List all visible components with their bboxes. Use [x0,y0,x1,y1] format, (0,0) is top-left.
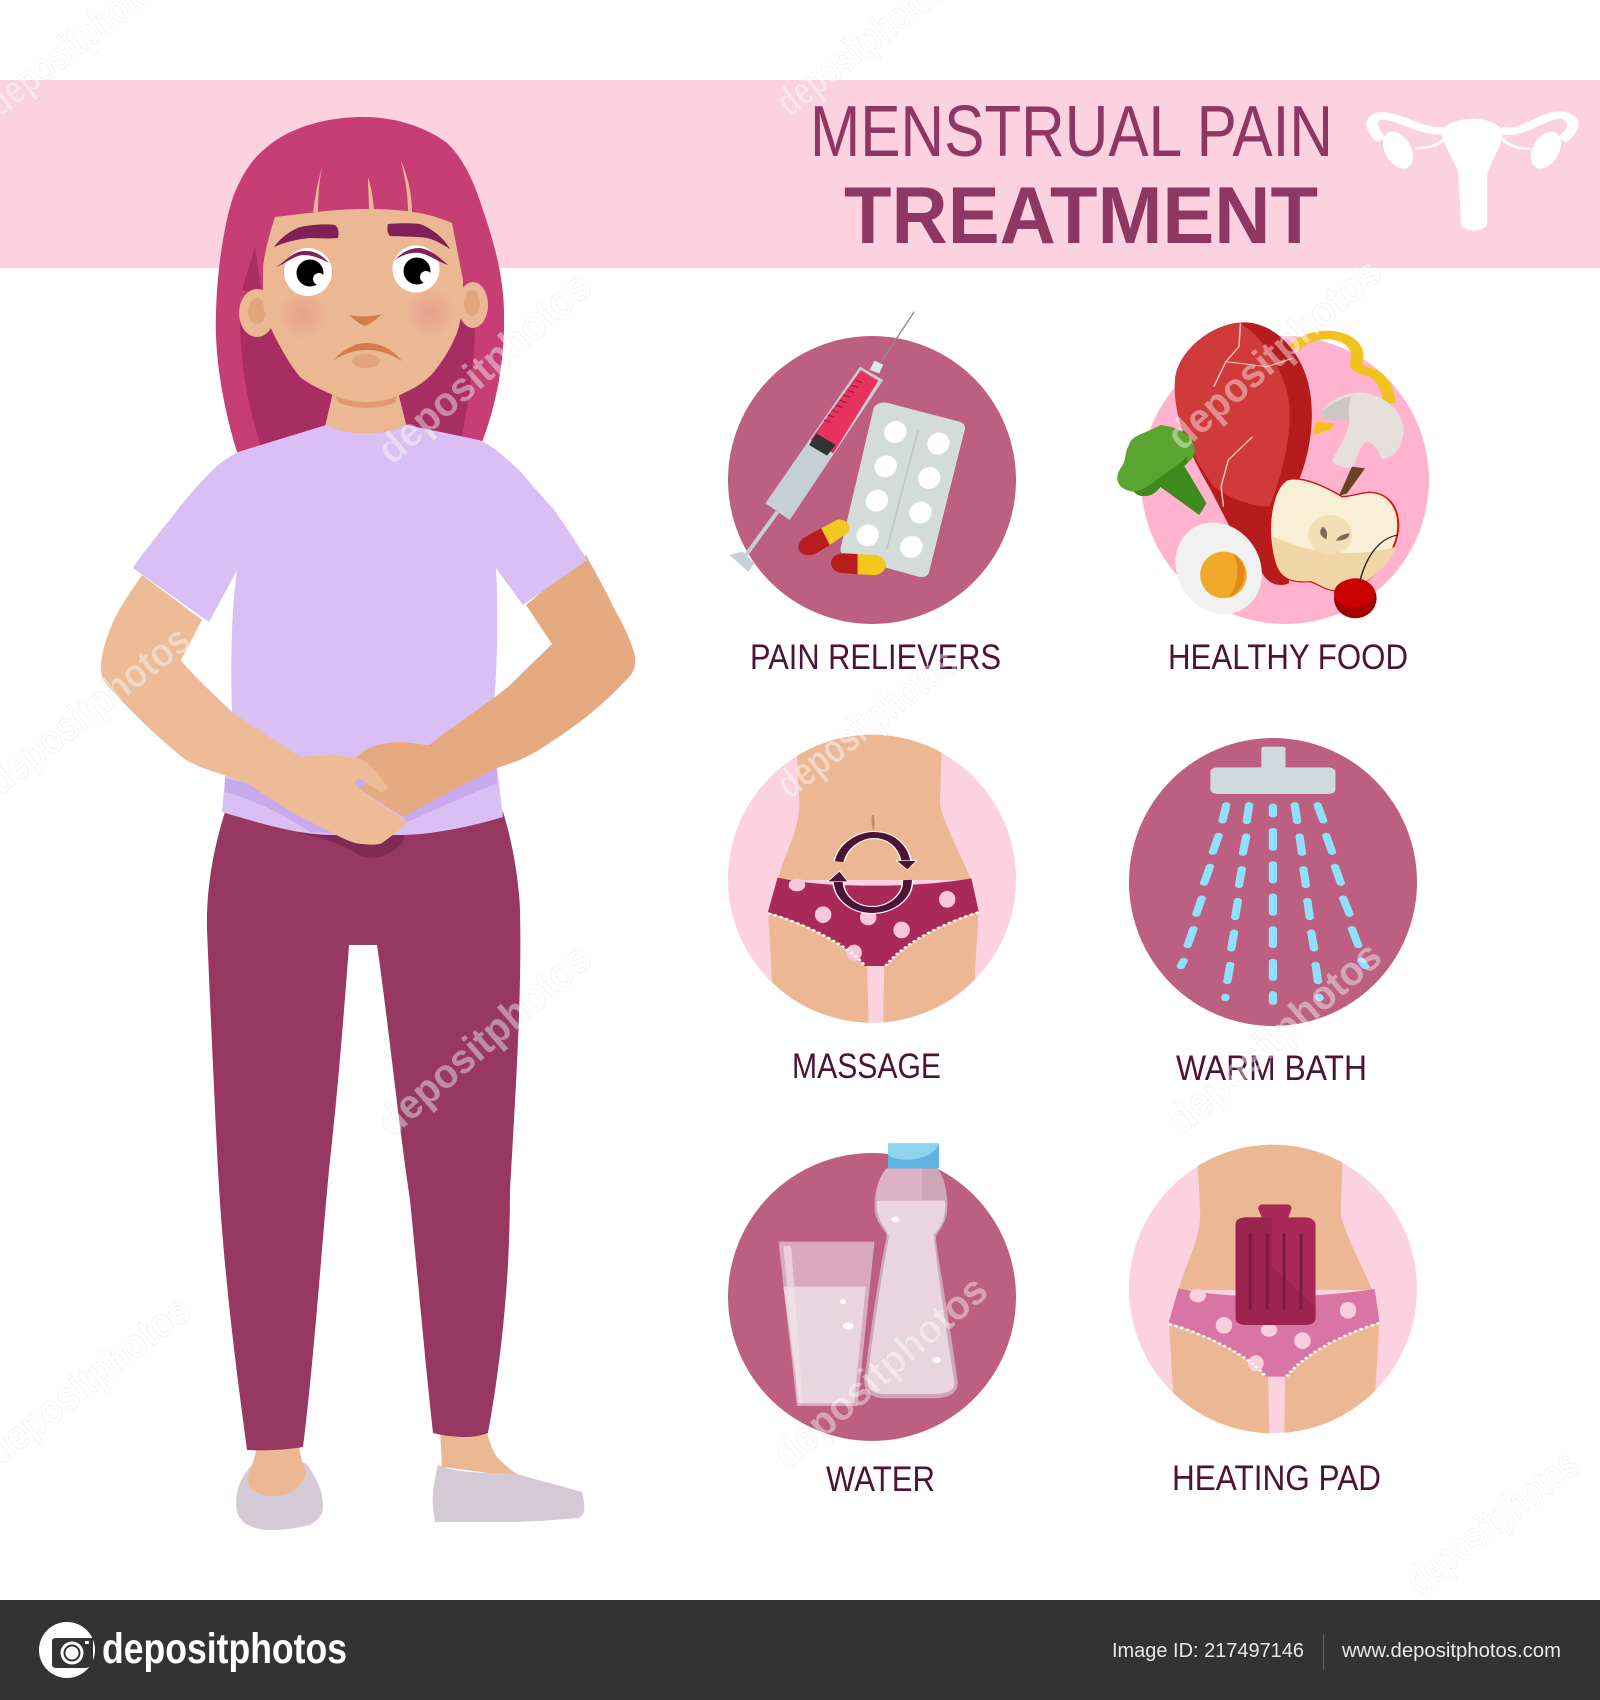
icon: abdomen with hot water bottle [1169,1137,1380,1440]
circle background [728,1153,1016,1441]
shoes and feet [236,1430,584,1530]
title [810,92,1333,261]
icon: uterus [1372,115,1573,230]
icon: shower [1181,747,1365,1002]
icon: logo camera [39,1622,95,1678]
pants shadow under hands [300,830,405,858]
mouth [332,343,402,361]
arm: viewer right [357,555,635,817]
circle background [1141,336,1429,624]
panel: warm bath [1129,738,1417,1088]
circle background [1129,1145,1417,1433]
watermarks: depositphotos [767,638,965,807]
arm: viewer left [101,575,407,845]
website: www.depositphotos.com [1341,1640,1561,1662]
chin dimple [352,354,380,368]
face [239,209,488,402]
watermarks: depositphotos [1158,248,1390,459]
title: TREATMENT [844,171,1318,261]
icon: glass and bottle [779,1143,958,1406]
hair back [216,117,504,455]
icon: food [1117,322,1404,618]
watermarks: depositphotos [368,934,600,1145]
circle background [728,336,1016,624]
label: HEALTHY FOOD [1168,638,1408,677]
logo text: depositphotos [102,1625,347,1673]
label: WARM BATH [1176,1049,1367,1088]
hair shadow [240,320,475,447]
shirt shade band [225,768,497,833]
icon: syringe and pills [729,312,965,577]
bang strands [313,161,412,212]
panel: massage [728,727,1016,1086]
watermarks: depositphotos [1158,932,1390,1143]
label: PAIN RELIEVERS [750,638,1001,677]
eyebrows [274,224,339,247]
circle background [728,735,1016,1023]
shirt [133,425,587,835]
neck [322,392,410,440]
shirt sleeves [133,440,587,622]
eyes [284,248,332,296]
watermarks: depositphotos [764,1266,996,1477]
panel: water [728,1143,1016,1499]
label: MASSAGE [792,1047,941,1086]
circle background [1129,738,1417,1026]
hot water bottle [1258,1204,1291,1218]
icon: abdomen with massage arrows [768,727,979,1030]
pants [207,812,520,1450]
title: MENSTRUAL PAIN [810,92,1333,172]
watermarks: depositphotos [368,262,600,473]
woman character [101,117,635,1530]
image id: Image ID: 217497146 [1112,1640,1304,1662]
panel: heating pad [1129,1137,1417,1498]
panel: pain relievers [728,312,1016,677]
icon: circular arrows [838,835,907,910]
panel: healthy food [1117,322,1429,677]
nose [349,314,382,326]
label: WATER [826,1460,935,1499]
footer bar [0,1600,1600,1700]
label: HEATING PAD [1172,1459,1381,1498]
header banner [0,80,1600,268]
